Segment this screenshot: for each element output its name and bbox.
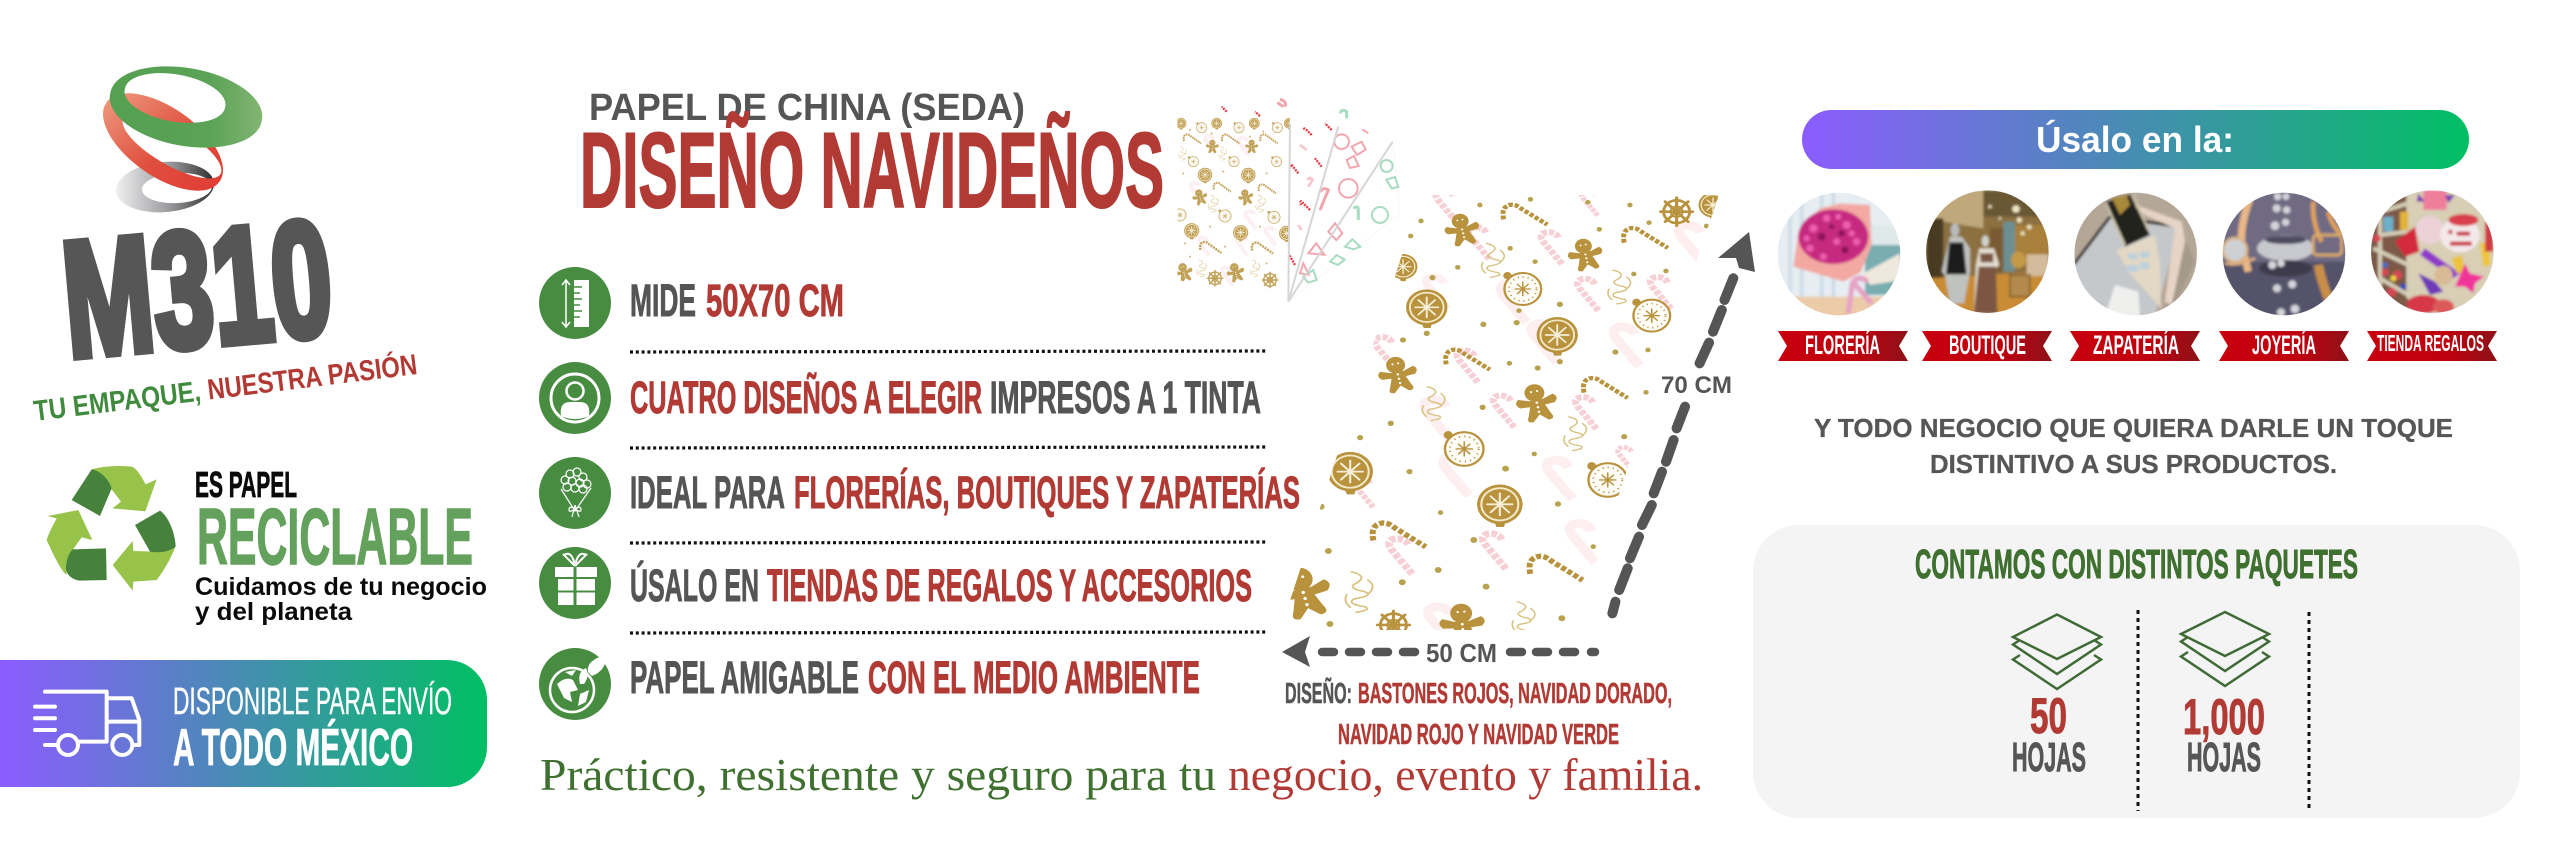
title block: DISEÑO NAVIDEÑOS [580, 110, 1164, 230]
ribbon: zapateria [2070, 329, 2200, 361]
label: hojas: HOJAS [2187, 734, 2261, 780]
icon: swirl logo [103, 66, 262, 212]
size text [630, 275, 844, 326]
arrow: 70 cm height [1612, 232, 1755, 613]
icon: ruler [539, 267, 611, 339]
ribbon: boutique: BOUTIQUE [1949, 330, 2026, 360]
recyclable text: ES PAPEL [195, 464, 297, 505]
ideal for text [630, 467, 1300, 518]
shipping text: DISPONIBLE PARA ENVÍO [173, 680, 452, 723]
paragraph: any business [1814, 413, 2453, 479]
label: 50 cm: 50 CM [1426, 638, 1497, 668]
caption: designs [1285, 676, 1672, 751]
panel: brand logo [32, 66, 419, 428]
photo: jewelry [2222, 192, 2347, 317]
photo: boutique [1925, 190, 2050, 315]
stores text: TIENDAS DE REGALOS Y ACCESORIOS [767, 560, 1252, 611]
image: main Christmas paper sheet [1290, 195, 1719, 630]
title block: PAPEL DE CHINA (SEDA) [589, 87, 1025, 129]
label: 70 cm: 70 CM [1661, 372, 1732, 399]
ribbon: tienda regalos [2367, 330, 2497, 361]
caption: designs: NAVIDAD ROJO Y NAVIDAD VERDE [1338, 719, 1619, 751]
feature row: stores [539, 547, 1252, 619]
banner: shipping [0, 660, 487, 787]
caption: designs: DISEÑO: [1285, 676, 1352, 710]
stores text [630, 560, 1252, 611]
shipping text [173, 680, 452, 777]
icon: paper stack [2181, 612, 2269, 686]
slogan line: negocio, evento y familia. [1228, 749, 1703, 800]
ribbon: joyeria [2219, 329, 2349, 361]
logo wordmark M310: M310 [56, 186, 339, 392]
designs text: IMPRESOS A 1 TINTA [990, 372, 1261, 423]
icon: globe with leaf [539, 648, 611, 720]
ribbon: boutique [1922, 330, 2052, 361]
recyclable text: RECICLABLE [197, 492, 473, 581]
icon: delivery truck [35, 692, 139, 755]
tagline: TU EMPAQUE, [32, 376, 203, 428]
caption: designs: BASTONES ROJOS, NAVIDAD DORADO, [1358, 678, 1672, 710]
ribbon: floreria: FLORERÍA [1805, 329, 1880, 360]
size text: 50X70 CM [706, 275, 844, 326]
arrow: 50 cm width [1282, 636, 1595, 668]
photo: gift store [2370, 190, 2495, 315]
tagline [32, 347, 419, 428]
photo: flower shop [1777, 192, 1903, 320]
count: 50: 50 [2030, 688, 2067, 744]
panel: recyclable paper [47, 464, 487, 626]
panel: packages [1753, 525, 2520, 818]
heading pill: use in: Úsalo en la: [2036, 118, 2234, 160]
ideal for text: IDEAL PARA [630, 467, 785, 518]
image: fanned paper sheets [1173, 99, 1400, 302]
paragraph: any business: Y TODO NEGOCIO QUE QUIERA DARLE UN TOQUE [1814, 413, 2453, 443]
title block [580, 87, 1164, 230]
photo: shoe store [2073, 192, 2198, 317]
ribbon: zapateria: ZAPATERÍA [2093, 329, 2179, 360]
package: 50 sheets [2012, 614, 2101, 780]
feature row: ideal for [539, 457, 1300, 529]
eco text: CON EL MEDIO AMBIENTE [868, 652, 1200, 703]
feature row: size [539, 267, 844, 339]
icon: bouquet [539, 457, 611, 529]
eco text [630, 652, 1200, 703]
icon: person [539, 362, 611, 434]
stores text: ÚSALO EN [630, 560, 759, 611]
tagline: NUESTRA PASIÓN [205, 347, 419, 407]
slogan line: Práctico, resistente y seguro para tu [540, 749, 1216, 800]
count: 1,000: 1,000 [2183, 689, 2265, 745]
label: hojas: HOJAS [2012, 734, 2086, 780]
icon: paper stack [2013, 614, 2101, 689]
shipping text: A TODO MÉXICO [173, 719, 413, 777]
feature row: designs [539, 362, 1261, 434]
eco text: PAPEL AMIGABLE [630, 652, 859, 703]
ribbon: joyeria: JOYERÍA [2252, 329, 2316, 360]
recyclable text: Cuidamos de tu negocio [195, 573, 487, 601]
slogan line [540, 749, 1703, 800]
icon: gift [539, 547, 611, 619]
recyclable text [195, 464, 487, 626]
designs text: CUATRO DISEÑOS A ELEGIR [630, 372, 982, 423]
heading pill: use in [1802, 110, 2469, 169]
recyclable text: y del planeta [195, 598, 353, 626]
icon: recycle arrows [47, 466, 176, 591]
ideal for text: FLORERÍAS, BOUTIQUES Y ZAPATERÍAS [794, 467, 1300, 518]
feature row: eco friendly [539, 648, 1200, 720]
package: 1000 sheets [2181, 612, 2269, 780]
ribbon: floreria [1778, 329, 1908, 361]
size text: MIDE [630, 275, 696, 326]
paragraph: any business: DISTINTIVO A SUS PRODUCTOS. [1930, 449, 2337, 479]
